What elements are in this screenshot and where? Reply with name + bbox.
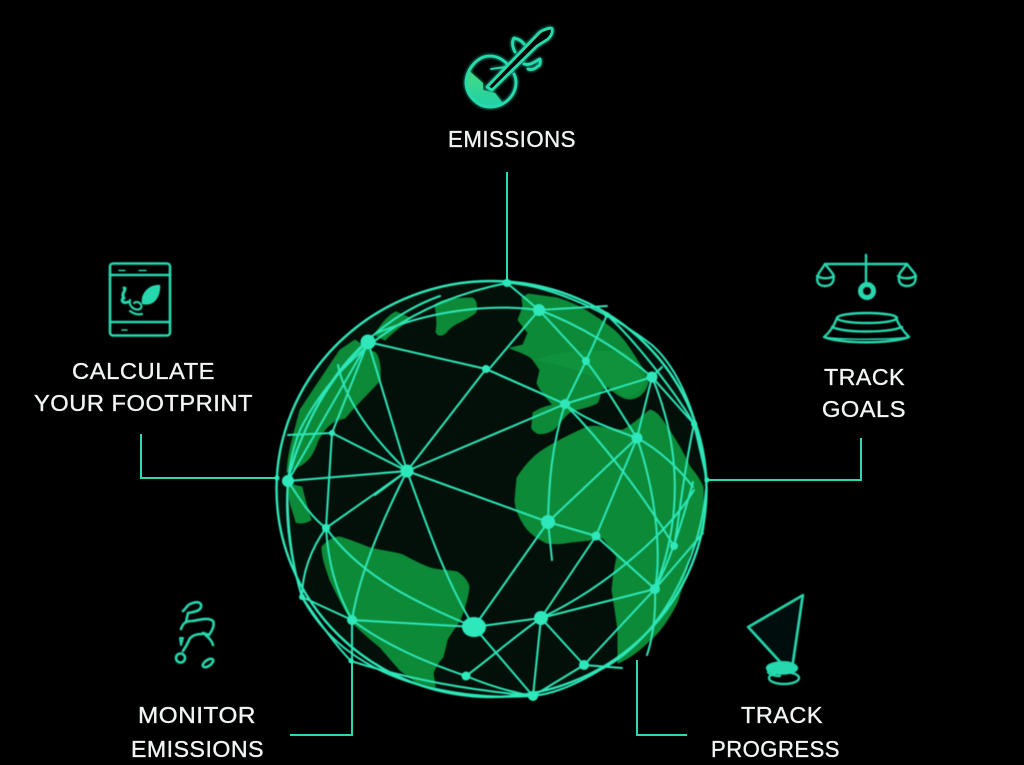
- label: emissions: EMISSIONS: [448, 126, 576, 152]
- item: calculate your footprint: [34, 264, 253, 416]
- globe: [274, 279, 710, 701]
- item: track goals: [817, 255, 916, 422]
- globe sphere: [276, 281, 706, 697]
- icon: monitor squiggle: [176, 602, 215, 669]
- land: south america: [322, 537, 469, 687]
- icon: cone over coins: [748, 595, 803, 684]
- continents: [287, 294, 704, 687]
- label: progress: PROGRESS: [711, 736, 840, 762]
- land: north-west: [287, 340, 380, 472]
- label: monitor: MONITOR: [138, 702, 256, 728]
- land: north-east: [510, 294, 648, 434]
- land: north-west islet: [375, 312, 410, 340]
- item: emissions: [448, 28, 576, 152]
- label: calculate: CALCULATE: [72, 358, 215, 384]
- label: goals: GOALS: [822, 396, 906, 422]
- lighter land shading: [535, 351, 645, 397]
- land: west islet: [288, 484, 311, 523]
- label: emissions: EMISSIONS: [131, 736, 264, 762]
- icon: scales and stacked platform: [817, 255, 916, 342]
- item: monitor emissions: [131, 602, 264, 762]
- icon: calculator with leaf: [110, 264, 170, 336]
- label: your footprint: YOUR FOOTPRINT: [34, 390, 253, 416]
- network nodes: [274, 279, 710, 701]
- network lines: [276, 281, 707, 697]
- land: north: [435, 298, 477, 335]
- land: africa: [515, 410, 704, 663]
- label: track: TRACK: [824, 364, 905, 390]
- connector lines: [141, 172, 861, 735]
- item: track progress: [711, 595, 840, 762]
- label: track: TRACK: [741, 702, 823, 728]
- icon: globe with rocket: [466, 28, 552, 107]
